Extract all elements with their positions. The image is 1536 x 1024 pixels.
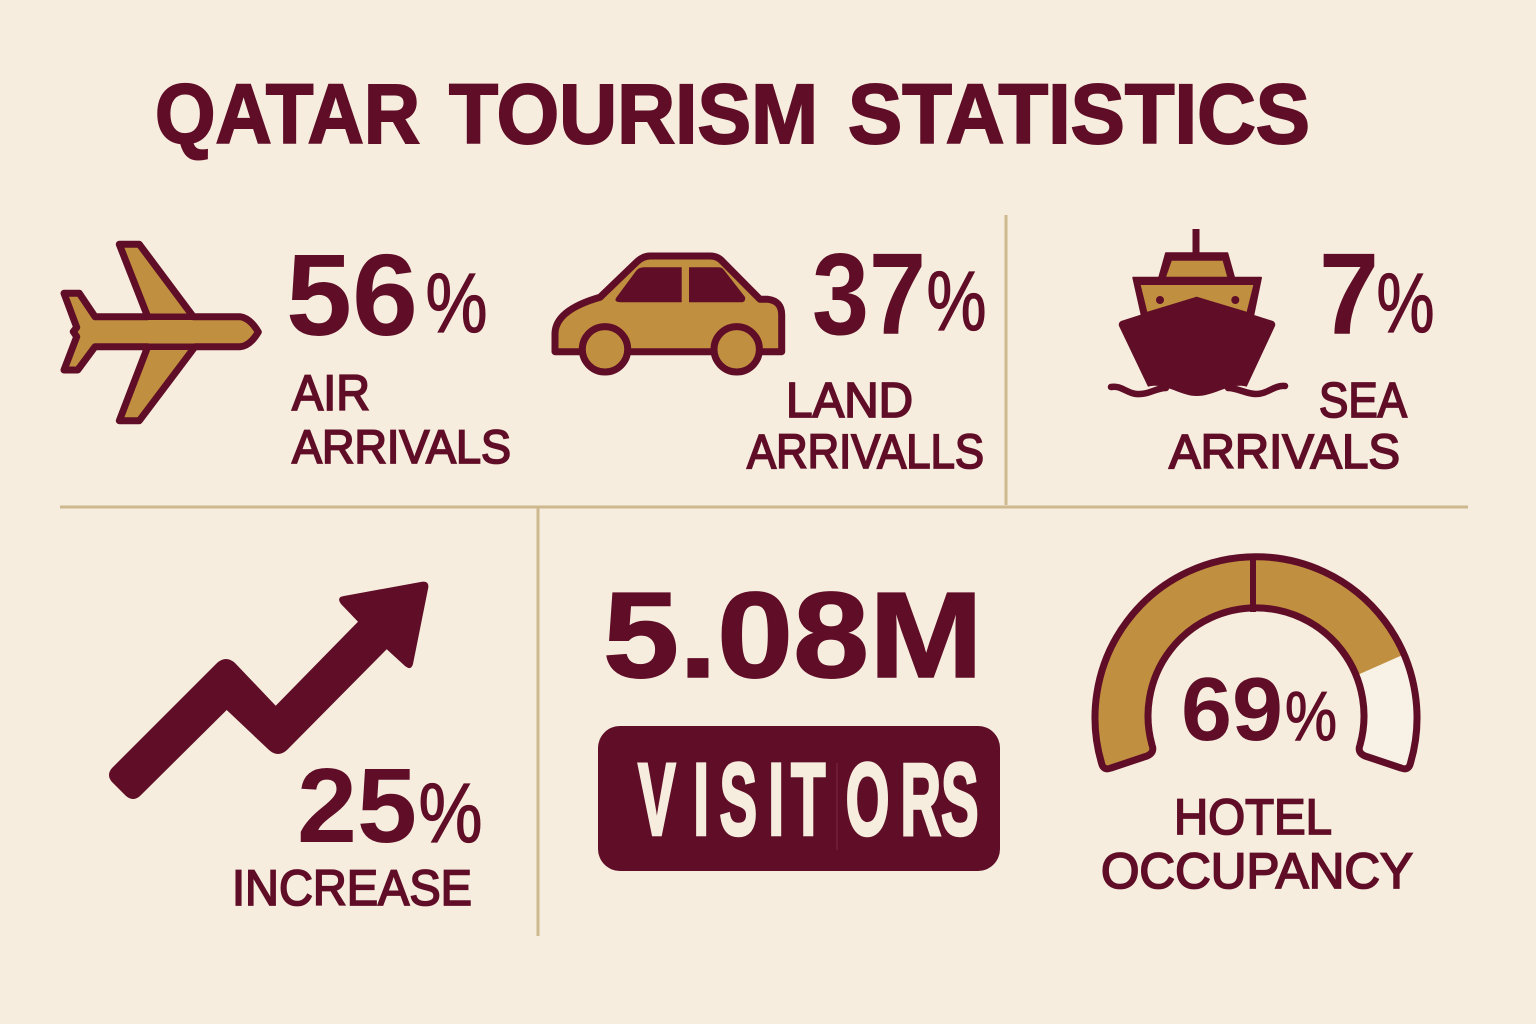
title xyxy=(155,67,1310,161)
label: increase: INCREASE xyxy=(232,860,472,916)
badge: visitors: VISITORS xyxy=(638,743,979,857)
label: land arrivals: ARRIVALLS xyxy=(747,426,984,479)
panel: land arrivals xyxy=(555,229,986,479)
icon: airplane xyxy=(64,244,258,421)
icon: rising arrow xyxy=(109,582,428,799)
value: 69%: 69 xyxy=(1181,660,1283,760)
icon: ship xyxy=(1111,229,1285,396)
icon: car xyxy=(555,256,782,372)
value: 69% xyxy=(1181,660,1337,760)
title: TOURISM xyxy=(449,67,818,161)
value: 56% xyxy=(286,230,488,360)
label: hotel occupancy: HOTEL xyxy=(1174,789,1332,845)
label: hotel occupancy xyxy=(1101,789,1413,899)
value: 7%: 7 xyxy=(1319,229,1379,359)
value: 56%: % xyxy=(426,256,488,350)
title: STATISTICS xyxy=(848,67,1310,161)
label: sea arrivals: ARRIVALS xyxy=(1169,426,1400,479)
value: 37%: % xyxy=(926,254,986,348)
panel: hotel occupancy xyxy=(1095,557,1417,899)
label: hotel occupancy: OCCUPANCY xyxy=(1101,843,1413,899)
label: land arrivals: LAND xyxy=(786,374,913,428)
value: 69%: % xyxy=(1285,677,1337,755)
panel: air arrivals xyxy=(64,230,511,473)
label: air arrivals xyxy=(292,365,511,473)
label: sea arrivals xyxy=(1169,374,1407,479)
chart: occupancy gauge xyxy=(1095,557,1417,769)
value: 7%: % xyxy=(1376,256,1434,350)
value: 25%: % xyxy=(418,766,482,860)
panel: sea arrivals xyxy=(1111,229,1434,479)
value: 5.08M: 5.08M xyxy=(603,567,983,703)
label: land arrivals xyxy=(747,374,984,479)
label: air arrivals: ARRIVALS xyxy=(292,420,511,473)
value: 25% xyxy=(297,747,482,865)
value: 56%: 56 xyxy=(286,230,418,360)
badge: visitors xyxy=(598,726,1000,871)
value: 7% xyxy=(1319,229,1434,359)
label: sea arrivals: SEA xyxy=(1319,374,1407,428)
value: 37%: 37 xyxy=(812,229,926,359)
label: air arrivals: AIR xyxy=(292,365,370,421)
title: QATAR xyxy=(155,67,420,161)
panel: increase xyxy=(109,582,482,916)
panel: visitors xyxy=(598,567,1000,871)
value: 25%: 25 xyxy=(297,747,417,865)
